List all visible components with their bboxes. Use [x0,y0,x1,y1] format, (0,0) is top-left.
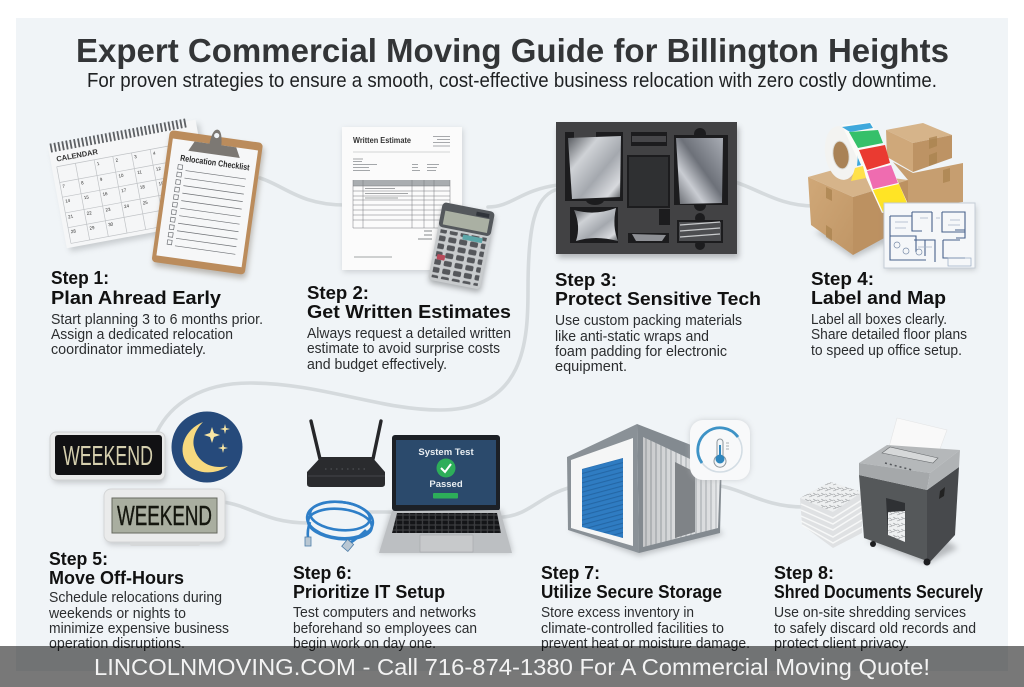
icon: written estimate document: Written Estimate [353,136,412,145]
icon: climate thermometer badge [690,420,750,480]
footer banner: LINCOLNMOVING.COM - Call 716-874-1380 For A Commercial Moving Quote! [94,654,930,680]
icon: moon and stars [172,412,242,482]
icon: calendar: 25 [142,200,149,206]
icon: laptop system test passed: System Test [418,447,474,458]
icon: storage container [567,424,722,553]
icon: shredded paper stack [800,482,862,548]
icon: calendar: 24 [124,203,130,209]
icon: calendar: 18 [139,184,146,190]
step 1 text: coordinator immediately. [51,341,206,358]
step 2 text: estimate to avoid surprise costs [307,340,500,357]
step 3 text: Protect Sensitive Tech [555,288,761,309]
step 1 text: Start planning 3 to 6 months prior. [51,311,263,328]
icon: calendar: 7 [62,184,66,189]
step 8 illustration: shredder and paper stack [800,418,960,566]
step 1 text [51,267,263,358]
icon: calendar: 23 [105,207,111,213]
step 2 text: Get Written Estimates [307,301,511,322]
step 7 text [541,562,750,652]
connector path between steps [157,178,814,523]
device in foam [629,157,668,206]
step 8 text: Shred Documents Securely [774,581,984,602]
step 3 text: equipment. [555,358,627,375]
step 1 illustration: calendar and checklist [47,116,266,279]
step 2 text: Step 2: [307,282,369,303]
step 2 illustration: estimate and calculator [342,127,496,293]
icon: calendar: 12 [155,166,162,172]
step 2 text: and budget effectively. [307,356,447,373]
icon: calendar: 5 [171,147,175,152]
step 8 text: to safely discard old records and [774,620,976,637]
step 6 text: Test computers and networks [293,604,476,621]
step 4 text: Label and Map [811,287,946,308]
step 8 text: Use on-site shredding services [774,604,966,621]
icon: LCD weekend display: WEEKEND [117,500,212,531]
step 3 text: foam padding for electronic [555,343,727,360]
icon: floor plan [884,203,976,270]
icon: calendar: 10 [118,173,124,179]
step 3 illustration: foam tray with anti-static bags [556,122,739,258]
step 5 illustration: weekend displays and moon [50,412,242,546]
step 6 text: Step 6: [293,562,352,583]
icon: calendar: 4 [152,150,156,156]
icon: written estimate document [342,127,463,272]
title: Expert Commercial Moving Guide for Billington Heights [76,33,949,70]
step 6 text: Prioritize IT Setup [293,581,445,602]
step 5 text: Move Off-Hours [49,567,184,588]
subtitle: For proven strategies to ensure a smooth, cost-effective business relocation with zero costly downtime. [87,70,937,92]
step 8 text: protect client privacy. [774,635,909,652]
step 3 text: Step 3: [555,269,617,290]
step 4 text: Step 4: [811,268,874,289]
icon: calendar: 3 [134,154,138,159]
icon: calendar: 29 [89,225,95,231]
icon: calendar: 28 [70,228,77,234]
step 5 text: Step 5: [49,548,108,569]
foam cutouts [565,128,728,250]
icon: clipboard checklist [151,123,266,279]
icon: calendar [47,116,218,252]
icon: blue ethernet cable [305,499,375,551]
step 2 text [307,282,511,373]
step 1 text: Step 1: [51,267,109,288]
icon: calendar: 30 [108,221,114,227]
step 7 text: prevent heat or moisture damage. [541,635,750,652]
icon: laptop system test passed [378,435,513,553]
icon: calendar: 16 [102,191,108,197]
icon: calendar: 22 [86,210,93,216]
icon: paper in shredder [889,418,947,457]
step 6 text: begin work on day one. [293,635,436,652]
icon: black weekend display: WEEKEND [63,440,153,471]
step 7 illustration: secure storage unit [567,420,750,556]
step 5 text: operation disruptions. [49,635,185,652]
step 4 text: Share detailed floor plans [811,326,967,343]
step 3 text: Use custom packing materials [555,312,742,329]
icon: black weekend display [50,432,166,483]
step 1 text: Plan Ahread Early [51,287,222,308]
icon: clipboard checklist: Relocation Checklist [180,153,250,172]
step 4 text [811,268,967,359]
icon: cardboard boxes [808,123,963,258]
step 7 text: Step 7: [541,562,600,583]
icon: colour label roll [821,122,908,213]
step 3 text: like anti-static wraps and [555,328,709,345]
footer banner [0,646,1024,687]
step 2 text: Always request a detailed written [307,325,511,342]
icon: calculator [427,202,496,293]
step 1 text: Assign a dedicated relocation [51,326,233,343]
step 4 illustration: boxes, labels and floor plan [808,122,976,270]
icon: laptop system test passed: Passed [429,479,463,490]
icon: paper shredder [859,445,960,566]
step 5 text: minimize expensive business [49,620,229,637]
icon: calendar: 19 [158,181,164,186]
step 6 text [293,562,477,652]
icon: calendar: 9 [99,177,103,182]
icon: calendar: 21 [68,214,74,219]
step 8 text: Step 8: [774,562,834,583]
step 6 illustration: router, cable, laptop [305,421,513,553]
icon: calendar: 14 [65,198,71,204]
step 5 text [48,548,229,652]
step 8 text [774,562,984,652]
icon: LCD weekend display [104,489,226,546]
step 4 text: to speed up office setup. [811,342,962,359]
step 7 text: Store excess inventory in [541,604,694,621]
step 5 text: weekends or nights to [48,605,186,622]
icon: calendar: 1 [96,161,100,166]
icon: calendar: 17 [121,187,127,193]
icon: calendar: 2 [115,157,119,163]
step 7 text: climate-controlled facilities to [541,620,724,637]
anti-static bags [568,136,723,241]
icon: calendar: CALENDAR [56,147,99,164]
step 4 text: Label all boxes clearly. [811,311,947,328]
step 6 text: beforehand so employees can [293,620,477,637]
step 3 text [555,269,761,375]
icon: calendar: 15 [83,194,90,200]
step 5 text: Schedule relocations during [49,589,222,606]
icon: router [307,421,385,487]
icon: calendar: 8 [81,180,85,186]
icon: calendar: 11 [137,169,143,175]
step 7 text: Utilize Secure Storage [541,581,722,602]
